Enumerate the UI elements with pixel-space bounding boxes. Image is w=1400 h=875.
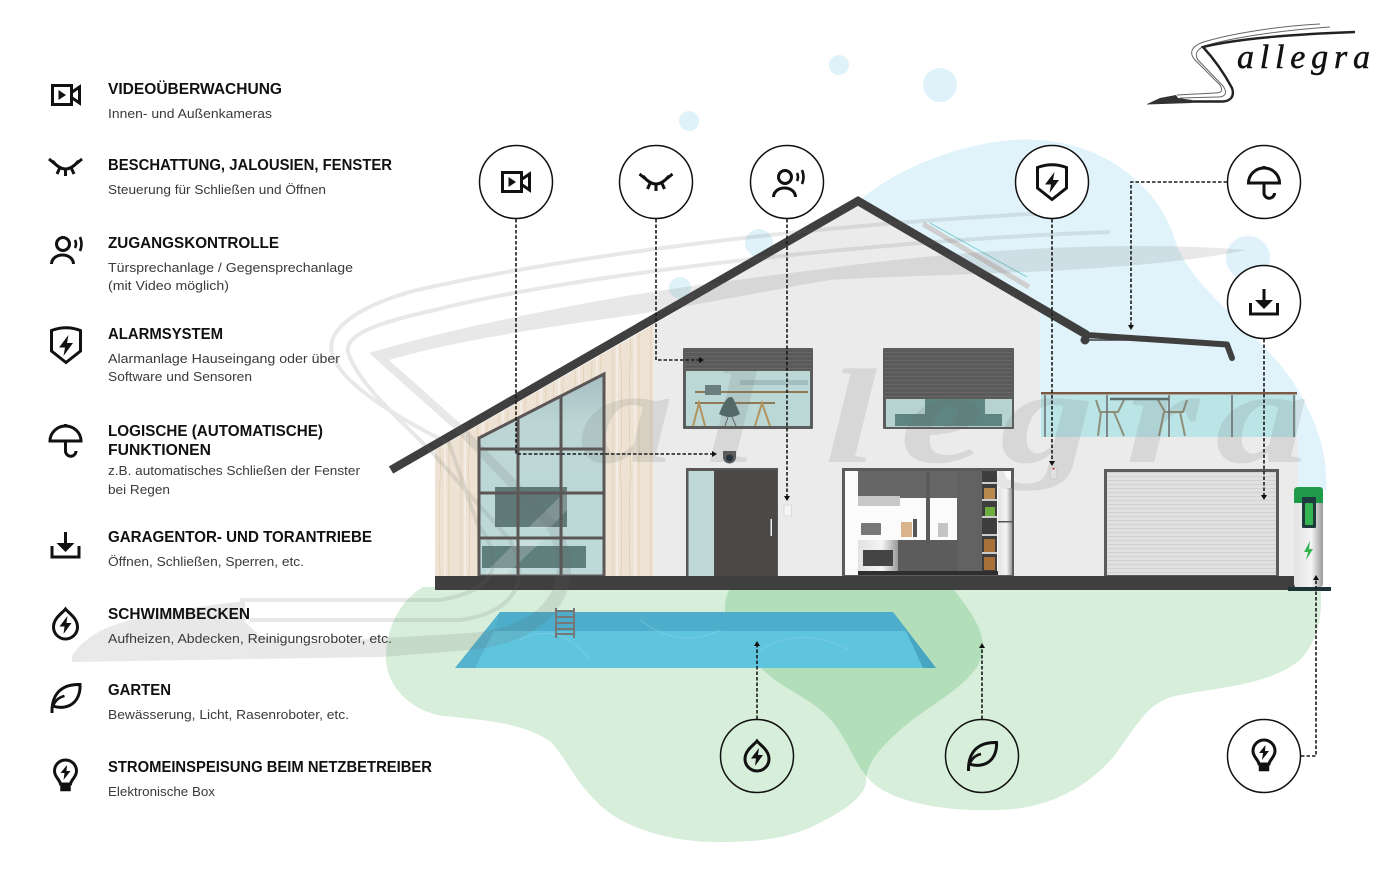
callout: garden (946, 720, 1018, 792)
callout: shading (620, 146, 692, 218)
watermark: allegra (580, 342, 1310, 492)
item: logic functions: FUNKTIONEN (108, 442, 211, 459)
callout: grid feed-in (1228, 720, 1300, 792)
feature list (49, 81, 432, 799)
callout: garage (1228, 266, 1300, 338)
watermark (72, 213, 1310, 662)
item: video surveillance (52, 81, 282, 121)
item: alarm system: Alarmanlage Hauseingang oder über (108, 351, 341, 366)
security camera (723, 451, 736, 464)
upper left window with blind (683, 348, 813, 429)
item: access control (52, 235, 353, 293)
alarm sensor (1050, 468, 1057, 479)
item: alarm system (52, 326, 341, 384)
background bubbles (669, 55, 1270, 299)
solar panel (923, 223, 1029, 287)
item: garden: Bewässerung, Licht, Rasenroboter, etc. (108, 707, 349, 722)
logo: Sallegra: allegra (1237, 39, 1370, 76)
item: grid feed-in: STROMEINSPEISUNG BEIM NETZBETREIBER (108, 759, 432, 776)
item: logic functions: bei Regen (108, 482, 170, 497)
item: access control: Türsprechanlage / Gegensprechanlage (108, 260, 353, 275)
item: garage drives: GARAGENTOR- UND TORANTRIEBE (108, 529, 372, 546)
upper right window with blind (883, 348, 1014, 429)
item: video surveillance: Innen- und Außenkameras (108, 106, 273, 121)
pool ladder (555, 608, 575, 638)
callout: access (750, 146, 824, 218)
callout: video (480, 146, 552, 218)
item: access control: (mit Video möglich) (108, 278, 229, 293)
item: garden (52, 682, 349, 722)
item: pool: Aufheizen, Abdecken, Reinigungsroboter, etc. (108, 631, 392, 646)
kitchen (842, 468, 1014, 576)
pool (455, 608, 936, 668)
callout: pool (720, 720, 794, 792)
item: grid feed-in (54, 759, 432, 799)
item: pool: SCHWIMMBECKEN (108, 606, 250, 623)
awning (1082, 335, 1232, 358)
green lawn blob left (386, 587, 983, 842)
garage door (1106, 470, 1278, 576)
item: alarm system: Software und Sensoren (108, 369, 252, 384)
large glazed window (479, 374, 604, 576)
door intercom (784, 505, 792, 516)
item: garden: GARTEN (108, 682, 171, 699)
timber facade (435, 325, 653, 576)
item: logic functions (50, 423, 361, 497)
terrace glass railing (1041, 392, 1297, 437)
item: shading: BESCHATTUNG, JALOUSIEN, FENSTER (108, 157, 392, 174)
item: garage drives (52, 529, 372, 569)
item: shading (49, 157, 392, 197)
logo: Sallegra (1147, 24, 1370, 104)
item: pool (54, 606, 392, 646)
background blob: sky (860, 139, 1326, 590)
callout: alarm (1016, 146, 1088, 218)
item: garage drives: Öffnen, Schließen, Sperren, etc. (108, 554, 304, 569)
callout: logic (1228, 146, 1300, 218)
item: grid feed-in: Elektronische Box (108, 784, 216, 799)
item: shading: Steuerung für Schließen und Öffnen (108, 182, 326, 197)
item: logic functions: z.B. automatisches Schließen der Fenster (108, 463, 361, 478)
EV charger / power box (1288, 487, 1331, 591)
roof (391, 201, 1087, 470)
item: access control: ZUGANGSKONTROLLE (108, 235, 279, 252)
main wall (653, 204, 1298, 576)
item: alarm system: ALARMSYSTEM (108, 326, 223, 343)
house (391, 201, 1331, 591)
dashed connector lines (516, 182, 1319, 756)
green lawn blob right (725, 587, 1321, 810)
item: video surveillance: VIDEOÜBERWACHUNG (108, 81, 282, 98)
item: logic functions: LOGISCHE (AUTOMATISCHE) (108, 423, 323, 440)
floor slab (435, 576, 1295, 590)
entrance door (686, 468, 778, 576)
